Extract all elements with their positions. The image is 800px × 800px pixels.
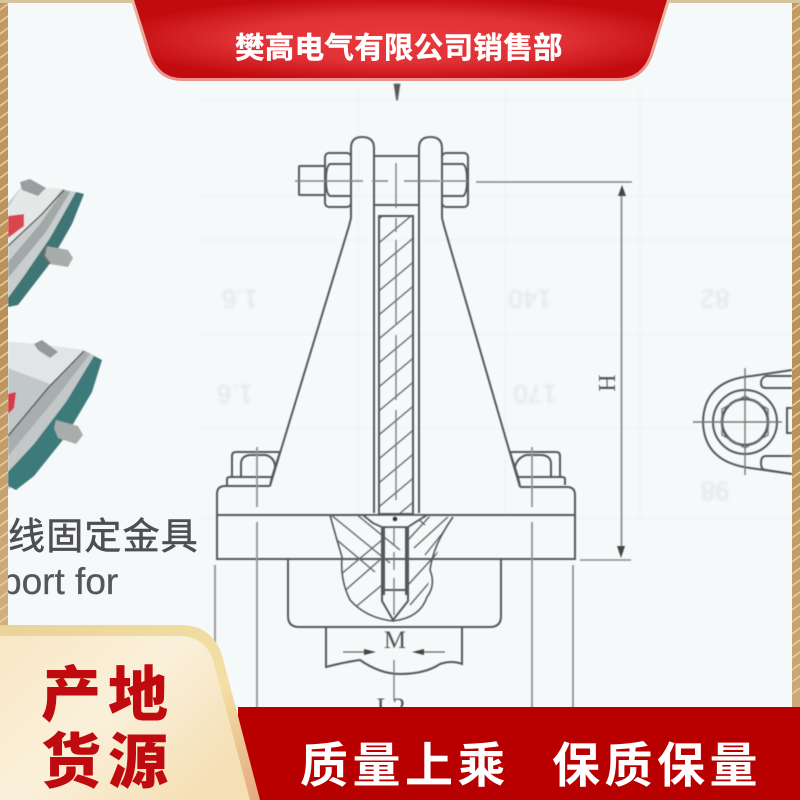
H dimension: H — [593, 374, 619, 392]
cream origin badge — [0, 625, 260, 800]
housing — [288, 559, 501, 627]
faint bleed-through table: 140 — [508, 284, 552, 314]
bolt and left nut — [299, 153, 351, 207]
badge text line 1: 产地 — [41, 662, 175, 729]
right rope border — [792, 0, 800, 800]
product photo: upper fitting — [8, 179, 84, 307]
L2 label: L2 — [377, 693, 405, 722]
faint bleed-through table: 98 — [701, 476, 729, 506]
header title: 樊高电气有限公司销售部 — [235, 32, 563, 65]
H dimension — [580, 185, 631, 560]
right base bolt — [510, 452, 565, 486]
countersunk screw — [363, 515, 427, 527]
right clevis arm — [419, 137, 520, 513]
spacer block — [374, 156, 419, 205]
side view fitting — [693, 368, 792, 475]
badge text line 2: 货源 — [41, 729, 175, 796]
slogan right: 保质保量 — [552, 740, 762, 793]
left base bolt — [227, 452, 280, 486]
header banner — [131, 0, 670, 81]
extension lines — [215, 447, 573, 710]
left rope border — [0, 0, 8, 640]
hatched section — [331, 515, 450, 607]
M dimension — [343, 627, 445, 655]
faint bleed-through table — [200, 90, 792, 520]
product photo: lower fitting — [8, 340, 102, 490]
bottom red bar — [238, 707, 800, 800]
top section arrow — [394, 84, 400, 100]
faint bleed-through table: 170 — [513, 379, 557, 409]
faint bleed-through table: 1.6 — [222, 284, 258, 314]
hatched bar — [379, 216, 413, 514]
flange — [217, 486, 575, 559]
technical drawing: clamp — [215, 84, 792, 722]
top rope border — [0, 0, 800, 3]
right nut — [442, 153, 468, 207]
faint bleed-through table: 82 — [701, 284, 729, 314]
M dimension: M — [384, 627, 406, 654]
left clevis arm — [270, 137, 374, 513]
caption: product name: 线固定金具 — [8, 516, 199, 557]
slogan left: 质量上乘 — [300, 740, 510, 793]
caption: english text: port for — [1, 561, 118, 602]
neck with wavy break — [326, 627, 462, 674]
faint bleed-through table: 1.6 — [217, 379, 253, 409]
centre lines — [295, 181, 632, 182]
